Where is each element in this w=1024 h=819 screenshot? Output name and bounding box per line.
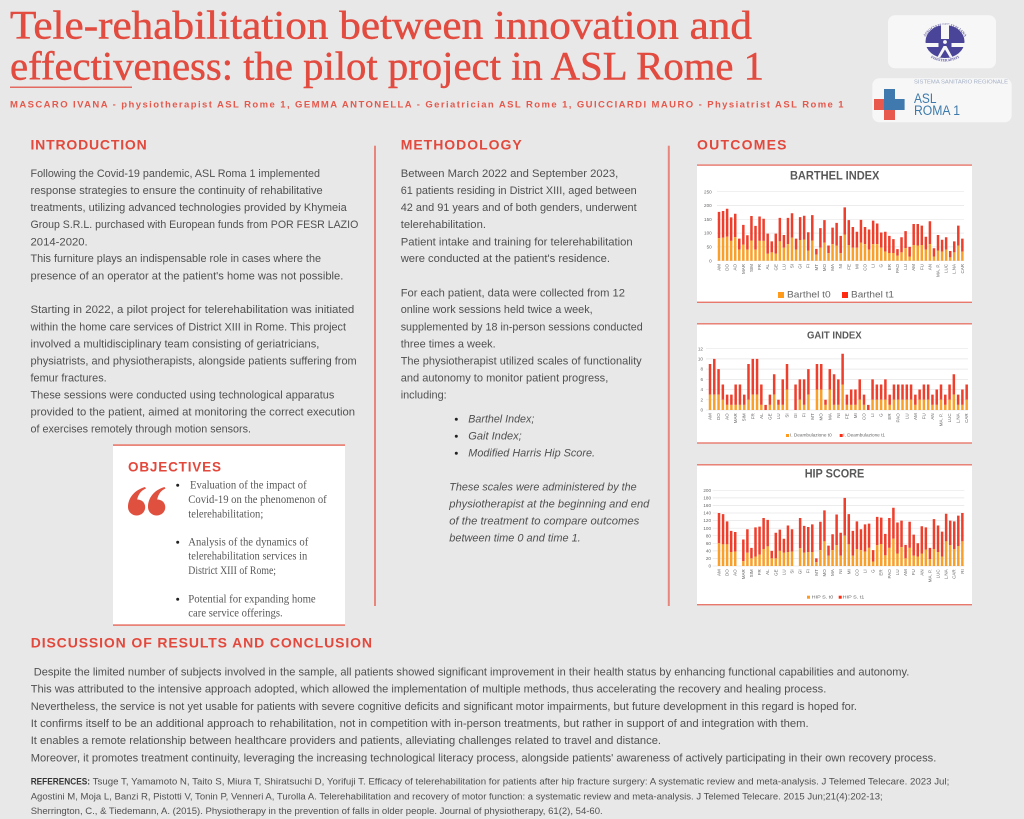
x labels: AM: [913, 413, 918, 420]
x labels: [716, 263, 965, 277]
x labels: NI: [838, 264, 843, 268]
x labels: MA. P.: [938, 413, 944, 426]
y axis: 120: [703, 518, 711, 523]
x labels: FR: [750, 413, 755, 419]
list: objectives: telerehabilitation;: [188, 507, 263, 520]
x labels: AL: [765, 264, 770, 270]
x labels: GE: [767, 413, 772, 420]
x labels: LU: [781, 569, 786, 575]
text: introduction body: involved a multidisciplinary team consisting of geriatricians,: [30, 338, 319, 350]
x labels: MT: [814, 264, 819, 270]
y axis: 0: [709, 258, 712, 263]
x labels: FI: [806, 569, 811, 573]
legend: Barthel t1: [851, 289, 894, 299]
x labels: CO: [854, 569, 859, 576]
list: scales: Modified Harris Hip Score.: [468, 447, 595, 459]
y axis: 200: [703, 488, 711, 493]
references: Agostini M, Moja L, Banzi R, Pistotti V, Tonin P, Venneri A, Turolla A. Telerehabilitation and recovery of motor function: a systematic review and meta-analysis. J Telemed Telecare. 2015 Jun;21(4):202-13;: [31, 791, 883, 802]
legend: I. Deambulazione t0: [790, 433, 832, 438]
text: scales note: between time 0 and time 1.: [449, 533, 581, 545]
text: methodology body: Between March 2022 and September 2023,: [401, 168, 618, 180]
y axis: 40: [706, 548, 711, 554]
chart: Barthel Index: [697, 164, 972, 303]
references: REFERENCES:: [31, 776, 90, 787]
legend: HIP S. t1: [843, 595, 865, 600]
list: objectives: District XIII of Rome;: [188, 564, 276, 577]
x labels: AM: [903, 569, 908, 576]
logo: ASL Roma 1: [872, 78, 1012, 122]
authors: MASCARO IVANA - physiotherapist ASL Rome 1, GEMMA ANTONELLA - Geriatrician ASL Rome 1, GUICCIARDI MAURO - Physiatrist ASL Rome 1: [10, 99, 844, 110]
y axis: 150: [704, 217, 712, 222]
text: introduction body: physiatrists, and physiotherapists, alongside patients suffering from: [30, 355, 357, 367]
x labels: ER: [887, 413, 892, 420]
text: introduction body: presence of an operator at the patient's home was not possible.: [30, 270, 343, 282]
x labels: CAR: [960, 263, 965, 274]
x labels: FR: [757, 263, 762, 270]
x labels: MA. P.: [927, 569, 932, 582]
x labels: GI: [798, 264, 803, 269]
text: methodology body: 61 patients residing in District XIII, aged between: [401, 185, 637, 197]
heading: discussion: DISCUSSION OF RESULTS AND CONCLUSION: [31, 635, 372, 651]
list: objectives: Potential for expanding home: [188, 592, 316, 605]
text: discussion body: It confirms itself to be an additional approach to rehabilitation, not in competition with in-person treatments, but rather in support of and integration with them.: [31, 718, 809, 730]
x labels: SI: [784, 413, 790, 418]
x labels: MI: [854, 264, 859, 269]
x labels: GI: [798, 569, 803, 574]
list: objectives: [176, 478, 327, 620]
x labels: MT: [814, 569, 819, 576]
text: introduction body: response strategies to ensure the continuity of rehabilitative: [30, 185, 323, 197]
y axis: 0: [708, 564, 711, 569]
chart: Gait Index: [697, 323, 972, 444]
x labels: CAR: [964, 413, 969, 423]
y axis: 80: [706, 533, 711, 538]
text: discussion body: Moreover, it promotes treatment continuity, leveraging the increasing technological literacy process, alongside patients' awareness of actively participating in their own recovery process.: [31, 752, 936, 764]
x labels: MAR: [733, 413, 738, 423]
icon: quotation marks: [128, 487, 166, 516]
text: scales note: physiotherapist at the beginning and end: [448, 499, 650, 511]
logo: Associazione Italiana Fisioterapisti: FISIOTERAPISTI: [930, 56, 960, 62]
text: introduction body: treatments, utilizing advanced technologies provided by Khymeia: [30, 202, 347, 214]
y axis: 6: [700, 377, 703, 382]
list: objectives: Analysis of the dynamics of: [188, 535, 308, 548]
x labels: SI: [790, 569, 794, 574]
logo: Associazione Italiana Fisioterapisti: [888, 16, 996, 68]
x labels: SIM: [749, 264, 754, 272]
x labels: MA. P.: [936, 264, 940, 277]
legend: I. Deambulazione t1: [843, 433, 885, 438]
heading: outcomes: OUTCOMES: [697, 136, 786, 152]
x labels: DO: [716, 413, 721, 420]
x labels: FU: [921, 413, 926, 419]
text: methodology body: For each patient, data were collected from 12: [401, 288, 625, 300]
text: methodology body: supplemented by 18 in-person sessions conducted: [401, 321, 643, 333]
text: methodology body: Patient intake and training for telerehabilitation: [401, 236, 633, 248]
x labels: AO: [733, 569, 738, 576]
y axis: 180: [703, 496, 711, 500]
x labels: AN: [919, 569, 924, 576]
x labels: LI: [871, 264, 876, 268]
x labels: MA: [830, 569, 835, 576]
y axis: 160: [703, 503, 711, 508]
y axis: 20: [706, 556, 711, 561]
x labels: RI: [960, 569, 965, 574]
text: methodology body: including:: [401, 389, 447, 401]
x labels: CAR: [952, 569, 957, 579]
heading: objectives: OBJECTIVES: [128, 460, 221, 475]
text: methodology body: telerehabilitation.: [401, 219, 486, 231]
text: introduction body: provided to the patient, aimed at monitoring the correct execution: [30, 407, 355, 419]
list: objectives: care service offerings.: [188, 607, 283, 620]
y axis: 60: [706, 541, 711, 546]
text: introduction body: 2014-2020.: [30, 236, 88, 248]
text: methodology body: were conducted at the patient's residence.: [400, 253, 610, 265]
x labels: LI: [862, 569, 868, 573]
x labels: MI: [846, 569, 851, 574]
y axis: [698, 346, 968, 413]
x labels: GE: [773, 569, 778, 576]
x labels: LUC: [944, 263, 949, 273]
legend: [786, 433, 885, 438]
text: discussion body: It enables a remote relationship between healthcare providers and patients, alleviating challenges related to travel and distance.: [31, 735, 661, 747]
x labels: AM: [708, 413, 712, 420]
y axis: 100: [703, 526, 711, 531]
y axis: 2: [700, 397, 703, 402]
references: Tsuge T, Yamamoto N, Taito S, Miura T, Shiratsuchi D, Yorifuji T. Efficacy of telerehabilitation for patients after hip fracture surgery: A systematic review and meta-analysis. J Telemed Telecare. 2023 Jul;: [93, 776, 949, 787]
x labels: AN: [927, 264, 932, 270]
panel: objectives: [113, 444, 345, 626]
text: introduction body: [30, 168, 358, 436]
title: [10, 2, 764, 88]
panel: introduction: [30, 136, 358, 436]
x labels: GI: [793, 413, 798, 418]
x labels: LUC: [947, 413, 952, 422]
x labels: LUC: [936, 569, 940, 578]
x labels: [708, 413, 969, 426]
text: discussion body: [31, 667, 936, 764]
x labels: GE: [773, 264, 778, 271]
x labels: DO: [725, 264, 730, 271]
x labels: SIM: [749, 569, 754, 577]
logo: ASL Roma 1: ASL: [914, 91, 937, 106]
x labels: LU: [781, 264, 786, 270]
text: methodology body: and autonomy to monitor patient progress,: [401, 372, 608, 384]
stacked bars: [719, 207, 962, 261]
heading: methodology: METHODOLOGY: [401, 136, 522, 152]
logo: ASL Roma 1: ROMA 1: [914, 103, 960, 118]
logo: ASL Roma 1: SISTEMA SANITARIO REGIONALE: [914, 80, 1008, 86]
list: objectives: Covid-19 on the phenomenon of: [188, 493, 327, 506]
x labels: AM: [716, 264, 722, 271]
x labels: NI: [836, 413, 841, 418]
text: introduction body: Group S.R.L. purchased with European funds from POR FESR LAZIO: [30, 219, 358, 231]
x labels: L.NA: [944, 569, 949, 579]
x labels: AM: [911, 264, 916, 271]
references: [31, 776, 949, 817]
y axis: 250: [704, 189, 712, 194]
text: methodology body: three times a week.: [401, 338, 496, 350]
panel: methodology: [400, 136, 650, 545]
x labels: AL: [759, 413, 764, 419]
x labels: FU: [919, 264, 924, 270]
text: introduction body: femur fractures.: [30, 372, 107, 384]
x labels: MT: [810, 413, 815, 420]
x labels: MO: [822, 264, 827, 271]
x labels: LI: [870, 413, 875, 417]
x labels: LU: [776, 413, 781, 419]
text: scales note: [448, 481, 650, 545]
x labels: L.NA: [956, 413, 961, 423]
text: scales note: of the treatment to compare outcomes: [449, 516, 640, 528]
text: introduction body: These sessions were conducted using technological apparatus: [30, 389, 335, 401]
logo: Associazione Italiana Fisioterapisti: ASSOCIAZIONE ITALIANA: [924, 23, 966, 37]
y axis: 100: [704, 231, 712, 236]
chart title: HIP SCORE: [805, 466, 864, 480]
x labels: FE: [844, 413, 849, 419]
x labels: MO: [819, 413, 824, 421]
title: Tele-rehabilitation between innovation and: [10, 2, 752, 47]
x labels: CO: [862, 264, 868, 271]
x labels: AO: [733, 264, 738, 271]
y axis: 8: [700, 367, 703, 372]
x labels: MAR: [741, 263, 746, 274]
y axis: 4: [700, 387, 703, 392]
y axis: 12: [698, 346, 703, 351]
text: scales note: These scales were administered by the: [449, 481, 637, 493]
x labels: LU: [895, 569, 900, 575]
x labels: G: [871, 569, 876, 573]
x labels: NI: [838, 569, 843, 574]
y axis: 200: [704, 203, 712, 208]
x labels: [716, 569, 965, 582]
x labels: SI: [790, 264, 794, 268]
y axis: [704, 189, 964, 263]
x labels: AM: [716, 569, 722, 576]
x labels: CO: [862, 413, 866, 420]
x labels: AO: [725, 413, 730, 420]
stacked bars: [719, 498, 962, 566]
y axis: 10: [698, 356, 703, 362]
title: effectiveness: the pilot project in ASL Rome 1: [10, 43, 764, 88]
stacked bars: [710, 354, 967, 410]
x labels: L.NA: [952, 264, 957, 274]
y axis: 50: [707, 244, 712, 250]
x labels: FI: [806, 264, 811, 268]
legend: HIP S. t0: [812, 595, 834, 600]
x labels: FU: [911, 569, 916, 575]
x labels: FR: [757, 569, 762, 575]
text: introduction body: Starting in 2022, a pilot project for telerehabilitation was initiated: [30, 304, 354, 316]
list: scales: Barthel Index;: [468, 413, 534, 425]
x labels: SIM: [742, 413, 747, 421]
x labels: MA: [827, 413, 832, 420]
list: scales: Gait Index;: [468, 430, 522, 442]
text: introduction body: This furniture plays an indispensable role in cases where the: [30, 253, 321, 265]
list: objectives: telerehabilitation services in: [188, 550, 307, 563]
y axis: [703, 488, 964, 569]
text: introduction body: Following the Covid-19 pandemic, ASL Roma 1 implemented: [30, 168, 320, 180]
x labels: G: [879, 264, 884, 268]
text: methodology body: [400, 168, 643, 401]
chart: Hip Score: [697, 464, 972, 605]
x labels: FE: [846, 264, 851, 270]
y axis: 140: [703, 511, 711, 516]
x labels: MO: [822, 569, 827, 577]
legend: [778, 289, 894, 299]
x labels: MAR: [741, 569, 746, 579]
x labels: AN: [930, 413, 935, 420]
column dividers: [374, 146, 670, 606]
x labels: DO: [725, 569, 730, 576]
x labels: PAO: [887, 569, 892, 578]
legend: Barthel t0: [787, 289, 831, 299]
chart title: BARTHEL INDEX: [790, 168, 880, 182]
x labels: ER: [879, 569, 884, 576]
x labels: MI: [853, 413, 858, 418]
text: methodology body: The physiotherapist utilized scales of functionality: [401, 355, 642, 367]
list: scales: [455, 413, 595, 459]
text: methodology body: online work sessions held twice a week,: [401, 304, 593, 316]
panel: discussion of results and conclusion: [31, 635, 949, 817]
x labels: PAO: [895, 264, 900, 273]
x labels: ER: [887, 263, 892, 270]
x labels: MA: [830, 264, 835, 271]
text: discussion body: This was attributed to the intensive approach adopted, which allowed the implementation of multiple methods, thus accelerating the recovery and healing process.: [31, 684, 826, 696]
x labels: LU: [904, 413, 909, 419]
text: discussion body: Nevertheless, the service is not yet usable for patients with severe cognitive deficits and significant motor impairments, but future development in this regard is hoped for.: [31, 701, 857, 713]
list: objectives: Evaluation of the impact of: [190, 478, 307, 491]
x labels: PAO: [896, 413, 901, 422]
x labels: AL: [765, 569, 770, 575]
chart title: GAIT INDEX: [807, 329, 862, 341]
legend: [807, 595, 865, 600]
text: methodology body: 42 and 91 years and of both genders, underwent: [401, 202, 638, 214]
references: Sherrington, C., & Tiedemann, A. (2015). Physiotherapy in the prevention of falls in older people. Journal of physiotherapy, 61(2), 54-60.: [31, 806, 603, 817]
text: discussion body: Despite the limited number of subjects involved in the sample, all patients showed significant improvement in their health status by enhancing functional capabilities and autonomy.: [34, 667, 909, 679]
x labels: G: [879, 413, 884, 417]
y axis: 0: [700, 408, 703, 413]
x labels: FI: [802, 413, 807, 417]
text: introduction body: of exercises remotely through motion sensors.: [30, 424, 251, 436]
heading: introduction: INTRODUCTION: [30, 136, 147, 152]
text: introduction body: within the home care services of District XIII in Rome. This project: [30, 321, 347, 333]
x labels: LU: [903, 264, 908, 270]
